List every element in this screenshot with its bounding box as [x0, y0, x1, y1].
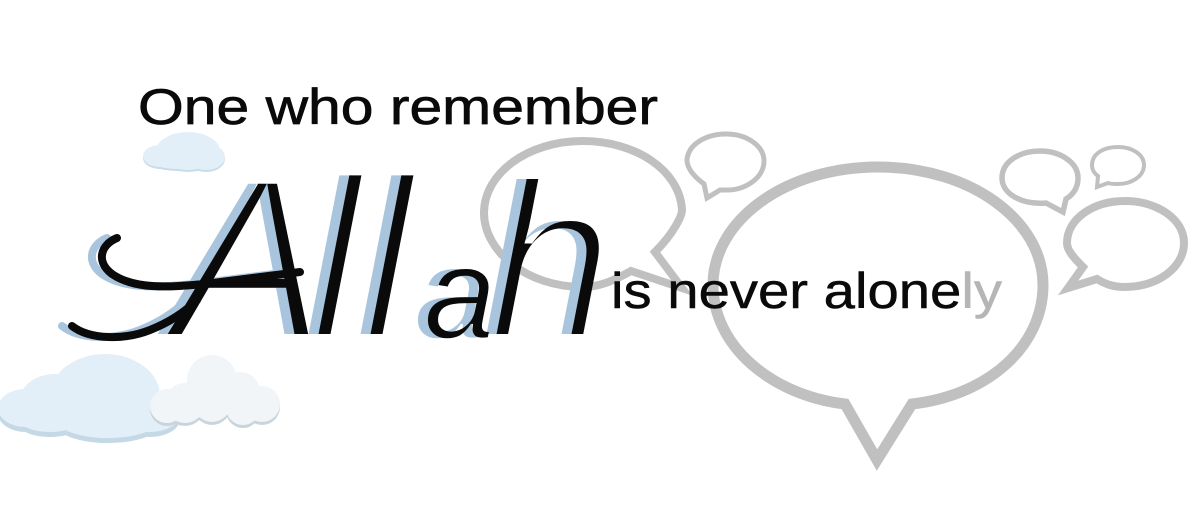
- speech bubble: large left: [484, 141, 682, 288]
- speech bubble: right lower: [1067, 201, 1184, 288]
- script word: Allah: [68, 175, 599, 342]
- script word shadow: Allah: l: [352, 130, 409, 387]
- script word: Allah: A: [160, 130, 325, 387]
- tagline: is never alone(ly): is never alone ly: [611, 263, 1002, 319]
- script word shadow: Allah: h: [478, 134, 603, 386]
- script word shadow: Allah: [58, 175, 586, 342]
- script word: Allah: l: [310, 130, 367, 387]
- speech bubble: small top: [687, 134, 764, 198]
- cloud: small near-white: [150, 355, 280, 428]
- cloud: large pale blue: [0, 354, 180, 443]
- script word: Allah: a: [424, 220, 496, 366]
- heading: One who remember: One who remember: [138, 79, 658, 135]
- script word: Allah: l: [362, 130, 419, 387]
- speech bubble: right upper small: [1092, 147, 1144, 187]
- script word shadow: Allah: A: [150, 130, 315, 387]
- speech bubble: central large: [713, 167, 1043, 460]
- script word: Allah: h: [488, 134, 613, 386]
- script word shadow: Allah: a: [414, 220, 486, 366]
- infographic canvas: [0, 87, 1188, 471]
- script word shadow: Allah: l: [300, 130, 357, 387]
- cloud: top small: [143, 132, 225, 172]
- speech bubble: right upper left: [1002, 151, 1078, 212]
